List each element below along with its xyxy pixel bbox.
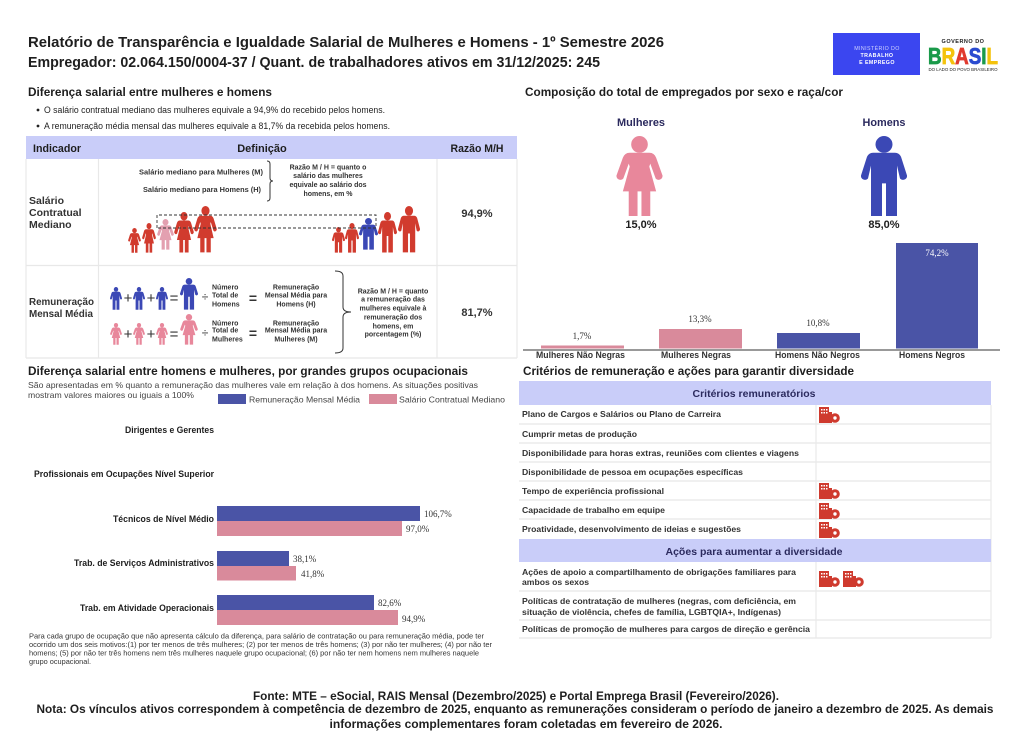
definition: razão remuneração (335, 271, 428, 353)
table header: Definição (237, 143, 287, 155)
footnote: homens; (5) por não ter três homens nem três mulheres naquele grupo ocupacional; (6) por não ter nem homens nem mulheres naquele (29, 648, 479, 658)
definition: razão remuneração: a remuneração das (361, 296, 425, 304)
source note: informações complementares foram coletadas em fevereiro de 2026. (330, 717, 722, 731)
source note (36, 689, 994, 731)
bar chart: composição por raça/cor: Mulheres Não Negras (536, 350, 625, 360)
icon: fila de pessoas homens (332, 206, 420, 253)
section header: critérios remuneratórios (519, 381, 991, 405)
row text: critérios: Capacidade de trabalho em equipe (522, 505, 665, 515)
row text: critérios: Tempo de experiência profissional (522, 486, 664, 496)
definition: fórmula mulheres: Número (212, 320, 238, 328)
row text: ações: Políticas de promoção de mulheres para cargos de direção e gerência (522, 624, 810, 634)
bar chart: composição por raça/cor: Homens Não Negros (775, 350, 860, 360)
footnote: ocorrido um dos seis motivos:(1) por ter menos de três mulheres; (2) por ter menos de três homens; (3) por não ter mulheres; (4) por não ter (29, 640, 493, 649)
heading: diferença salarial: Diferença salarial entre mulheres e homens (28, 85, 272, 99)
section header: ações: Ações para aumentar a diversidade (666, 547, 843, 558)
definition: razão remuneração: Razão M / H = quanto (358, 288, 428, 296)
definition: salário mediano: salário das mulheres (293, 173, 363, 180)
logo: Governo do Brasil: DO LADO DO POVO BRASILEIRO (928, 67, 998, 72)
table header: Indicador (33, 143, 82, 155)
bullet text: A remuneração média mensal das mulheres equivale a 81,7% da recebida pelos homens. (44, 121, 390, 131)
definition: salário mediano: Razão M / H = quanto o (290, 164, 366, 172)
bar chart: composição por raça/cor: Mulheres Negras (661, 350, 731, 360)
row text: critérios: Disponibilidade de pessoa em ocupações específicas (522, 467, 743, 477)
heading: diferença por grupos ocupacionais: Diferença salarial entre homens e mulheres, por grandes grupos ocupacionais (28, 364, 468, 378)
logo: Governo do Brasil: GOVERNO DO (942, 39, 985, 45)
icon: mulheres 15,0% (616, 117, 665, 231)
title: Relatório de Transparência e Igualdade Salarial de Mulheres e Homens - 1º Semestre 2026 (28, 34, 664, 51)
definition: fórmula homens: Total de (212, 292, 238, 300)
definition: razão remuneração: homens, em (373, 324, 413, 330)
bar chart: grupos ocupacionais: Profissionais em Ocupações Nível Superior (34, 469, 215, 479)
row text: critérios (522, 409, 799, 534)
bullet text: O salário contratual mediano das mulheres equivale a 94,9% do recebido pelos homens. (44, 105, 385, 115)
bar chart: grupos ocupacionais: Trab. de Serviços Administrativos (74, 558, 214, 568)
indicator: remuneração mensal média (29, 296, 94, 320)
bar chart: grupos ocupacionais: 94,9% (402, 614, 426, 624)
title (28, 34, 664, 71)
bar chart: composição por raça/cor: 74,2% (925, 248, 949, 258)
definition: fórmula mulheres: Mensal Média para (265, 328, 327, 334)
section header: ações (519, 539, 991, 562)
definition: salário mediano (139, 161, 367, 201)
bar chart: grupos ocupacionais: 38,1% (293, 554, 317, 564)
definition: fórmula mulheres: ÷ (202, 326, 209, 340)
definition: fórmula mulheres: Total de (212, 328, 238, 334)
definition: fórmula homens: Homens (H) (276, 302, 316, 308)
indicator: salário contratual mediano: Salário (29, 195, 64, 207)
logo: Governo do Brasil: BRASIL (928, 43, 998, 69)
icon: homens 85,0% (861, 117, 907, 231)
definition: fórmula homens: ÷ (202, 290, 209, 304)
icons: empresa (819, 407, 864, 587)
bar chart: grupos ocupacionais: 97,0% (406, 524, 430, 534)
definition: fórmula mulheres: = (249, 325, 257, 341)
bar chart: grupos ocupacionais: Técnicos de Nível Médio (113, 514, 215, 524)
definition: razão remuneração: remuneração dos (364, 314, 422, 322)
legend (218, 394, 505, 404)
definition: fórmula homens: Homens (212, 302, 240, 308)
definition: fórmula mulheres: + (147, 326, 156, 343)
footnote (29, 632, 493, 666)
title: Empregador: 02.064.150/0004-37 / Quant. de trabalhadores ativos em 31/12/2025: 245 (28, 54, 600, 71)
bar chart: grupos ocupacionais: 82,6% (378, 598, 402, 608)
definition: fórmula mulheres: Remuneração (273, 320, 319, 328)
logo: Ministério do Trabalho e Emprego (833, 33, 920, 75)
source note: Nota: Os vínculos ativos correspondem à competência de dezembro de 2025, enquanto as remunerações consideram o período de janeiro a dezembro de 2025. As demais (36, 702, 994, 716)
table header (26, 136, 517, 159)
definition: fórmula mulheres: Mulheres (212, 336, 243, 344)
row text: ações: situação de violência, chefes de família, LGBTQIA+, Indígenas) (522, 607, 781, 617)
definition: salário mediano: equivale ao salário dos (289, 182, 367, 189)
panel: tabela de indicadores (26, 136, 517, 358)
definition: fórmula mulheres: Mulheres (M) (274, 336, 318, 344)
icon: fila de pessoas mulheres (128, 206, 217, 253)
legend: Salário Contratual Mediano (399, 394, 505, 404)
definition: salário mediano: Salário mediano para Mulheres (M) (139, 170, 263, 176)
bar chart: composição por raça/cor (523, 243, 1000, 360)
definition: fórmula homens: Mensal Média para (265, 292, 327, 300)
heading: critérios: Critérios de remuneração e ações para garantir diversidade (523, 364, 854, 378)
value: 81,7%: 81,7% (461, 307, 493, 319)
definition: razão remuneração: mulheres equivale à (360, 306, 427, 312)
indicator: salário contratual mediano: Mediano (29, 219, 72, 231)
bar chart: grupos ocupacionais: 41,8% (301, 569, 325, 579)
row text: critérios: Disponibilidade para horas extras, reuniões com clientes e viagens (522, 448, 799, 458)
footnote: Para cada grupo de ocupação que não apresenta cálculo da diferença, para salário de contratação ou para remuneração média, pode ter (29, 632, 485, 640)
row text: ações: ambos os sexos (522, 577, 589, 587)
icon: mulheres 15,0%: 15,0% (625, 219, 657, 231)
heading: composição: Composição do total de empregados por sexo e raça/cor (525, 85, 843, 99)
text block: explicação (28, 380, 478, 400)
row text: critérios: Proatividade, desenvolvimento de ideias e sugestões (522, 524, 741, 534)
bar chart: composição por raça/cor: 13,3% (688, 314, 712, 324)
bar chart: grupos ocupacionais: 106,7% (424, 509, 452, 519)
row text: ações: Políticas de contratação de mulheres (negras, com deficiência, em (522, 596, 796, 606)
text block: explicação: mostram valores maiores ou iguais a 100% (28, 390, 195, 400)
definition: fórmula mulheres: = (170, 326, 179, 343)
section header: critérios remuneratórios: Critérios remuneratórios (692, 389, 816, 400)
bullet text (37, 105, 390, 131)
definition: fórmula mulheres: + (124, 326, 133, 343)
logo: Ministério do Trabalho e Emprego: MINISTÉRIO DO (854, 45, 900, 52)
logo: Ministério do Trabalho e Emprego: TRABALHO (861, 53, 893, 59)
bar chart: grupos ocupacionais: Dirigentes e Gerentes (125, 425, 214, 435)
bar chart: grupos ocupacionais (34, 425, 452, 625)
row text: ações: Ações de apoio a compartilhamento de obrigações familiares para (522, 567, 796, 577)
indicator: salário contratual mediano: Contratual (29, 207, 82, 219)
definition: fórmula homens: + (124, 290, 133, 307)
row text: ações (522, 567, 810, 634)
definition: fórmula homens: + (147, 290, 156, 307)
definition: fórmula homens: Remuneração (273, 284, 319, 292)
logo: Ministério do Trabalho e Emprego: E EMPREGO (859, 60, 895, 66)
value: 94,9%: 94,9% (461, 208, 493, 220)
bar chart: composição por raça/cor: 10,8% (806, 318, 830, 328)
legend: Remuneração Mensal Média (249, 394, 360, 404)
definition: salário mediano: homens, em % (303, 191, 353, 198)
bar chart: composição por raça/cor: Homens Negros (899, 350, 965, 360)
bar chart: grupos ocupacionais: Trab. em Atividade Operacionais (80, 603, 214, 613)
source note: Fonte: MTE – eSocial, RAIS Mensal (Dezembro/2025) e Portal Emprega Brasil (Fevereiro/2026). (253, 689, 779, 703)
definition: salário mediano: Salário mediano para Homens (H) (143, 187, 261, 194)
definition: fórmula homens: Número (212, 284, 238, 292)
icon: mulheres 15,0%: Mulheres (617, 117, 665, 129)
row text: critérios: Plano de Cargos e Salários ou Plano de Carreira (522, 409, 721, 419)
indicator: salário contratual mediano (29, 195, 82, 231)
footnote: grupo ocupacional. (29, 657, 91, 666)
text block: explicação: São apresentadas em % quanto a remuneração das mulheres vale em relação à dos homens. As situações positivas (28, 380, 478, 390)
panel: critérios remuneratórios e ações (519, 381, 991, 638)
bar chart: composição por raça/cor: 1,7% (573, 331, 592, 341)
row text: critérios: Cumprir metas de produção (522, 429, 637, 439)
indicator: remuneração mensal média: Mensal Média (29, 308, 93, 320)
indicator: remuneração mensal média: Remuneração (29, 296, 94, 308)
definition: fórmula homens (110, 278, 327, 310)
definition: fórmula homens: = (170, 290, 179, 307)
definition: razão remuneração: porcentagem (%) (365, 332, 421, 338)
definition: fórmula mulheres (110, 314, 327, 345)
icon: homens 85,0%: Homens (862, 117, 906, 129)
table header: Razão M/H (450, 143, 504, 155)
definition: fórmula homens: = (249, 290, 257, 306)
icon: homens 85,0%: 85,0% (868, 219, 900, 231)
